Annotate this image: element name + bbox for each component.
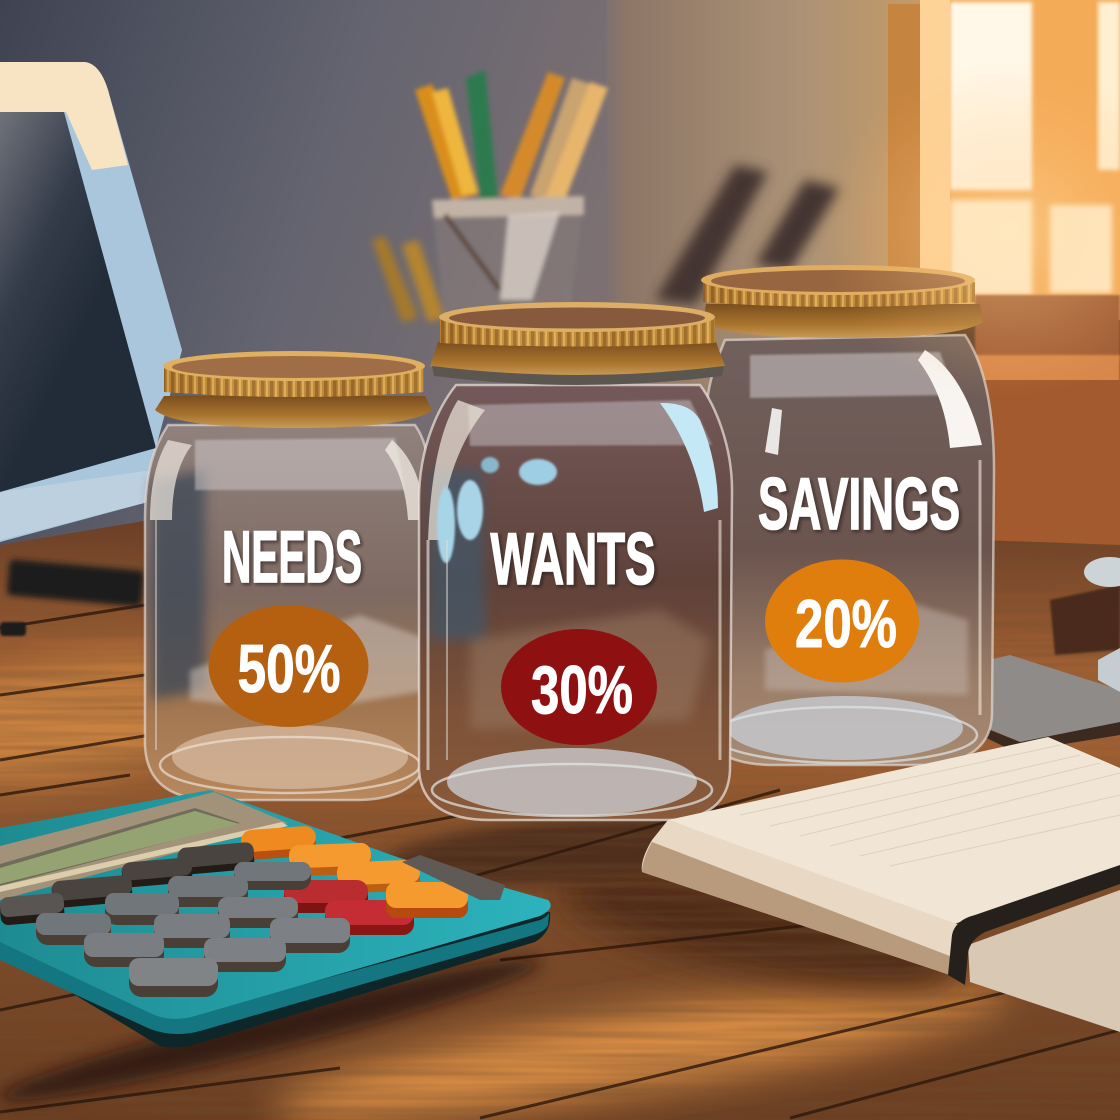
dark keys xyxy=(0,842,255,926)
needs jar glass xyxy=(145,425,430,800)
wants percentage badge: 30% xyxy=(531,652,633,728)
blurred dark objects on the shelf xyxy=(655,165,840,305)
notebook xyxy=(642,737,1120,1032)
calculator body xyxy=(0,912,550,1047)
wants label: WANTS xyxy=(490,519,656,600)
last orange key xyxy=(386,882,468,918)
needs jar lid xyxy=(155,351,432,428)
red keys xyxy=(284,880,414,935)
wants percentage badge xyxy=(501,629,657,745)
notebook pages xyxy=(668,737,1120,925)
savings label: SAVINGS xyxy=(758,464,960,545)
jar: savings xyxy=(701,265,994,765)
wants jar glass xyxy=(419,385,732,820)
calculator xyxy=(0,790,551,1117)
calculator faceplate and display xyxy=(0,792,288,900)
orange keys xyxy=(240,825,420,893)
savings jar lid xyxy=(701,265,983,338)
savings percentage badge: 20% xyxy=(795,586,897,662)
needs percentage badge xyxy=(208,605,368,727)
warm sunlight glow xyxy=(820,60,1120,400)
notebook lower block xyxy=(968,890,1120,1032)
calculator keys xyxy=(0,825,505,997)
background wall and window xyxy=(0,0,1120,560)
jar: wants xyxy=(419,302,732,820)
notebook elastic strap xyxy=(948,865,1120,985)
needs percentage badge: 50% xyxy=(238,631,340,707)
jar: needs xyxy=(145,351,432,800)
needs label: NEEDS xyxy=(222,517,362,598)
savings percentage badge xyxy=(765,560,919,682)
savings jar glass xyxy=(705,335,994,765)
grey keys xyxy=(36,862,350,997)
monitor on the left xyxy=(0,62,182,542)
notebook spine edge xyxy=(642,820,960,975)
wants jar lid xyxy=(430,302,725,385)
wooden desk xyxy=(0,520,1120,1120)
pencil cup xyxy=(372,70,608,330)
